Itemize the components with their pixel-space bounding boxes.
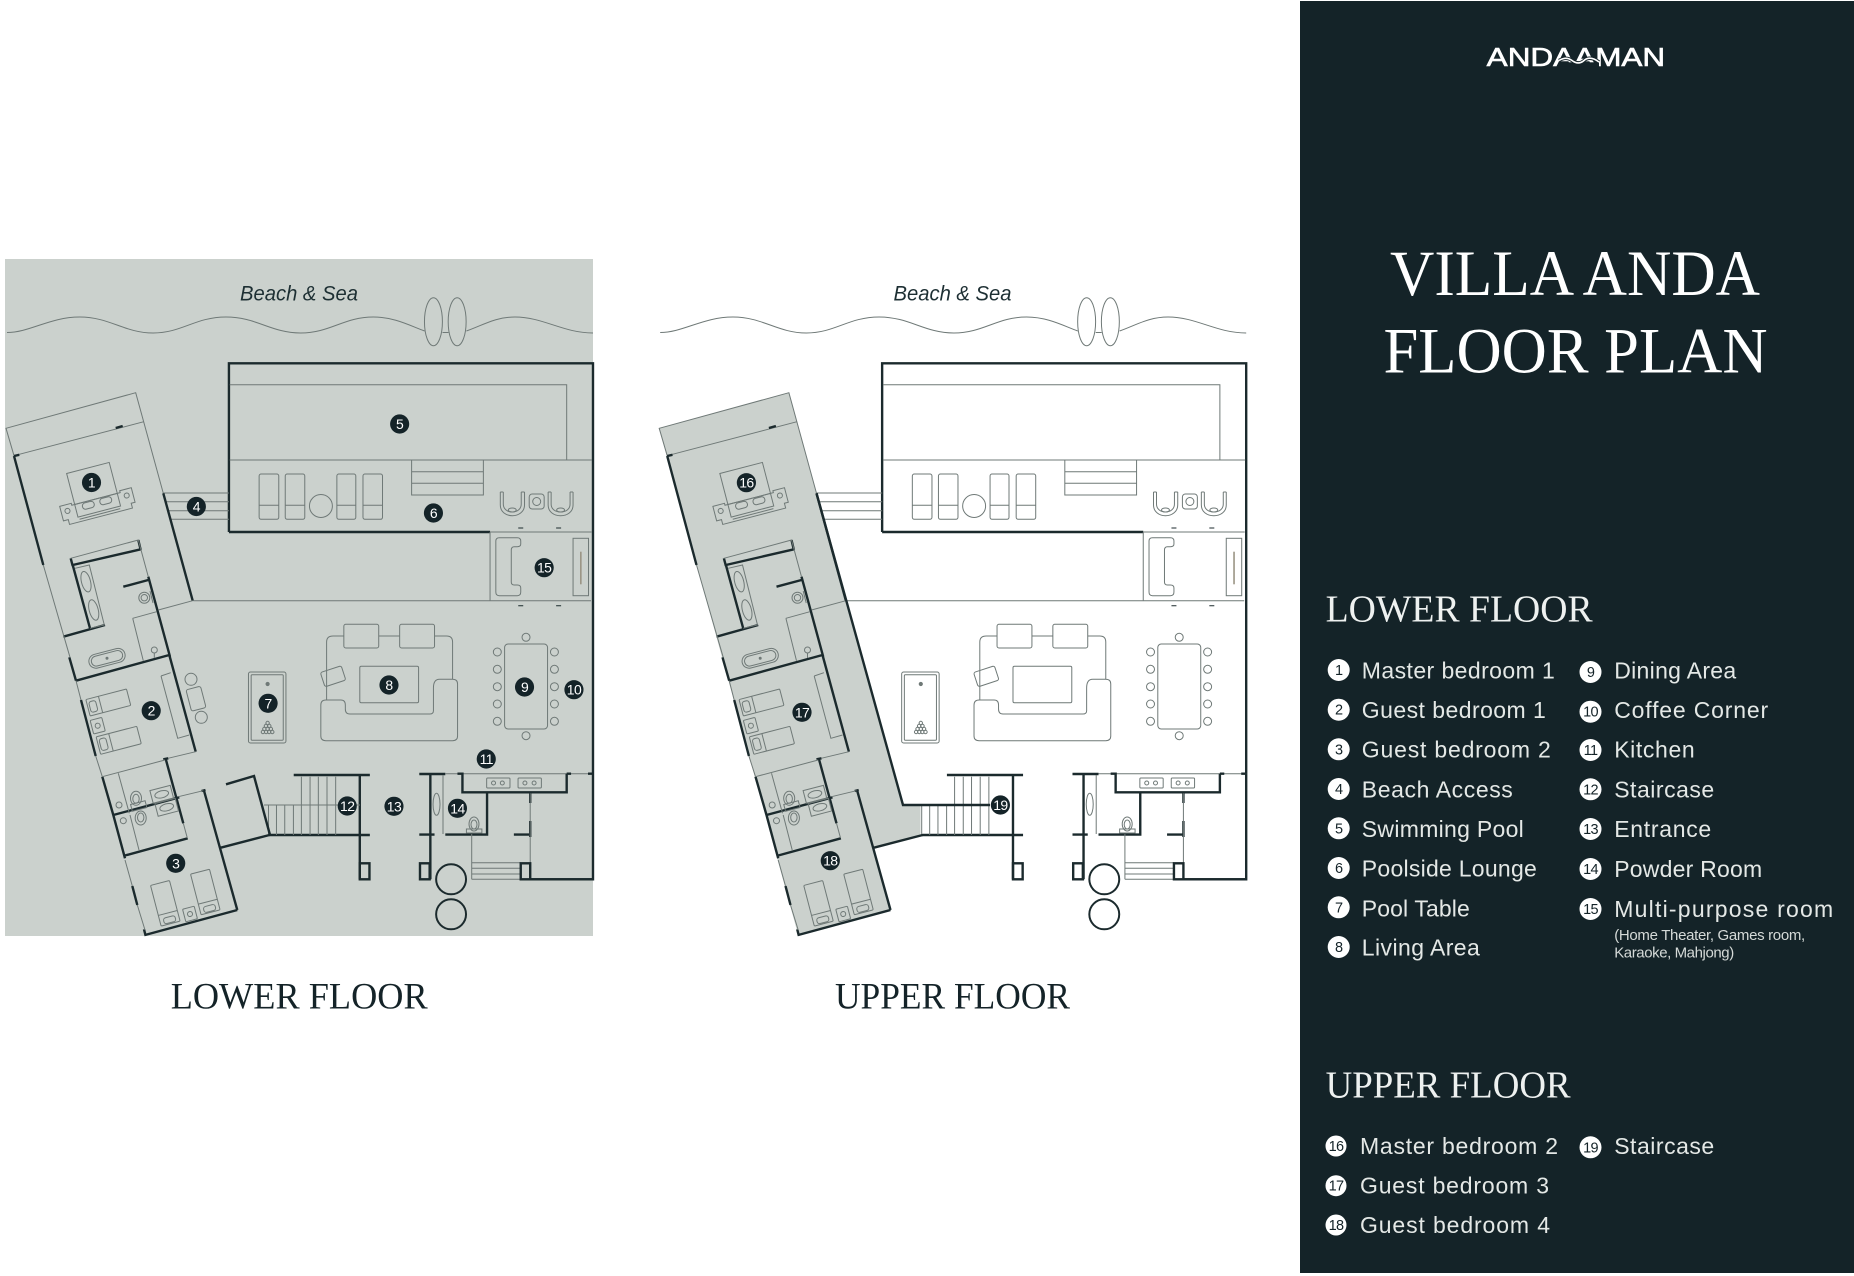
caption: lower floor: LOWER FLOOR <box>171 976 428 1017</box>
markers: lower floor numbers: 3 <box>172 855 180 871</box>
legend: upper floor: 16 <box>1329 1139 1344 1155</box>
legend: lower floor column two: 12 <box>1583 782 1598 798</box>
markers: upper floor numbers: 16 <box>739 475 754 491</box>
legend: lower floor column two: 9 <box>1587 665 1595 681</box>
legend: lower floor column two: Staircase <box>1614 776 1714 802</box>
markers: lower floor numbers: 5 <box>396 416 404 432</box>
legend: lower floor column two: 13 <box>1583 822 1598 838</box>
legend: upper floor: Guest bedroom 3 <box>1360 1172 1549 1198</box>
legend: lower floor column one: 8 <box>1335 940 1343 956</box>
legend: lower floor column two: Powder Room <box>1614 856 1762 882</box>
legend: lower floor column two: 14 <box>1583 862 1598 878</box>
kitchen counter and sinks <box>445 774 593 792</box>
legend: lower floor column one: 1 <box>1335 663 1343 679</box>
legend: lower floor column one: Guest bedroom 1 <box>1362 697 1546 723</box>
wing: terrace outline <box>6 393 163 493</box>
markers: lower floor numbers: 1 <box>88 474 96 491</box>
markers: lower floor numbers: 13 <box>387 798 402 814</box>
panel: lower floor plan <box>5 259 593 936</box>
master bathroom fixtures <box>75 565 157 670</box>
lower floor only: outdoor seating beside bedroom two <box>185 673 207 723</box>
legend: lower floor column two: 11 <box>1584 743 1598 759</box>
legend: lower floor column two: Multi-purpose room <box>1614 896 1833 922</box>
shared floor plan drawing <box>6 298 593 936</box>
entrance planters <box>436 864 466 929</box>
legend: upper floor: 19 <box>1583 1140 1598 1156</box>
title <box>1384 238 1768 388</box>
legend: lower floor column two: 15 <box>1583 902 1598 918</box>
legend: upper floor: 17 <box>1329 1179 1344 1195</box>
title: VILLA ANDA <box>1390 238 1760 310</box>
markers: lower floor numbers: 2 <box>148 703 156 719</box>
guest bathrooms <box>116 785 178 825</box>
entrance right walls and powder room <box>419 774 487 879</box>
markers: lower floor numbers: 6 <box>430 505 438 521</box>
legend: lower floor column one: 4 <box>1335 782 1343 798</box>
pool table <box>248 672 286 743</box>
title: FLOOR PLAN <box>1384 316 1768 388</box>
upper floor only: exterior wing wall and stair wall <box>816 493 990 805</box>
legend: lower floor column one: 6 <box>1335 861 1343 877</box>
markers: lower floor numbers: 14 <box>450 800 465 816</box>
bedroom three beds <box>151 869 220 926</box>
markers: lower floor numbers: 12 <box>340 798 355 814</box>
poolside chairs <box>500 492 573 516</box>
master bed <box>52 459 136 526</box>
legend: lower floor column one: 5 <box>1335 821 1343 837</box>
label: upper beach and sea: Beach & Sea <box>894 283 1012 306</box>
markers: lower floor numbers <box>82 414 584 873</box>
upper floor shaded wing <box>659 393 920 935</box>
caption: upper floor: UPPER FLOOR <box>835 976 1070 1017</box>
legend: lower floor column one <box>1328 657 1555 961</box>
logo: Andaaman: ANDAAMAN <box>1487 42 1665 72</box>
markers: lower floor numbers: 10 <box>567 682 582 698</box>
panel: dark sidebar <box>1300 1 1854 1273</box>
panel: upper floor plan <box>659 283 1246 936</box>
markers: upper floor numbers: 18 <box>823 853 838 869</box>
legend: lower floor column one: Beach Access <box>1362 776 1513 802</box>
sidebar background <box>1300 1 1854 1273</box>
markers: lower floor numbers: 4 <box>193 498 201 515</box>
legend: lower floor column two: 10 <box>1583 705 1598 721</box>
legend: lower floor column two <box>1580 657 1833 961</box>
legend: upper floor: Guest bedroom 4 <box>1360 1212 1550 1238</box>
bedroom two beds and desk <box>86 673 189 754</box>
living room sofa set <box>320 624 458 741</box>
legend: lower floor column one: Swimming Pool <box>1362 816 1524 842</box>
legend: upper floor <box>1326 1133 1714 1238</box>
main building drawing <box>7 298 593 929</box>
heading: lower floor legend: LOWER FLOOR <box>1326 589 1593 631</box>
legend: lower floor column one: 3 <box>1335 742 1343 758</box>
upper floor plan drawing <box>659 298 1246 936</box>
legend: lower floor column one: 7 <box>1335 900 1343 916</box>
markers: lower floor numbers: 7 <box>265 695 273 711</box>
markers: upper floor numbers <box>737 473 1010 870</box>
legend: lower floor column two: (Home Theater, Games room, <box>1614 927 1805 944</box>
lower floor only: interior door walls <box>226 776 270 835</box>
legend: lower floor column two: Karaoke, Mahjong) <box>1614 944 1734 961</box>
legend: lower floor column one: Master bedroom 1 <box>1362 657 1555 683</box>
legend: lower floor column two: Entrance <box>1614 816 1711 842</box>
entry hall and steps <box>472 793 593 879</box>
legend: upper floor: 18 <box>1329 1218 1344 1234</box>
heading: upper floor legend: UPPER FLOOR <box>1326 1064 1571 1106</box>
legend: lower floor column one: Pool Table <box>1362 895 1470 921</box>
sun loungers and side table <box>259 474 383 519</box>
markers: upper floor numbers: 17 <box>795 704 810 720</box>
wing: thin partition lines <box>43 540 203 930</box>
legend: upper floor: Staircase <box>1614 1133 1714 1159</box>
legend: lower floor column two: Kitchen <box>1614 737 1695 763</box>
beach access steps <box>163 493 229 519</box>
shoreline waves and surfboards <box>7 298 593 346</box>
lower floor background <box>5 259 593 936</box>
swimming pool outline <box>230 385 592 460</box>
markers: lower floor numbers: 11 <box>480 751 494 767</box>
markers: lower floor numbers: 9 <box>521 679 529 695</box>
dining table and chairs <box>493 633 558 740</box>
legend: lower floor column one: 2 <box>1335 703 1343 719</box>
markers: lower floor numbers: 8 <box>385 677 393 693</box>
pool steps <box>412 460 483 495</box>
legend: lower floor column two: Coffee Corner <box>1614 697 1769 723</box>
pool terrace walls <box>229 363 593 879</box>
legend: lower floor column two: Dining Area <box>1614 657 1736 683</box>
label: beach and sea: Beach & Sea <box>240 283 358 306</box>
lower floor only: stair landing line <box>264 804 360 806</box>
multi-purpose room <box>193 528 591 606</box>
legend: lower floor column one: Guest bedroom 2 <box>1362 737 1551 763</box>
legend: upper floor: Master bedroom 2 <box>1360 1133 1558 1159</box>
markers: upper floor numbers: 19 <box>993 797 1008 813</box>
legend: lower floor column one: Poolside Lounge <box>1362 855 1537 881</box>
markers: lower floor numbers: 15 <box>537 560 552 576</box>
wing: thick walls <box>14 426 270 936</box>
legend: lower floor column one: Living Area <box>1362 935 1480 961</box>
staircase <box>269 775 370 879</box>
